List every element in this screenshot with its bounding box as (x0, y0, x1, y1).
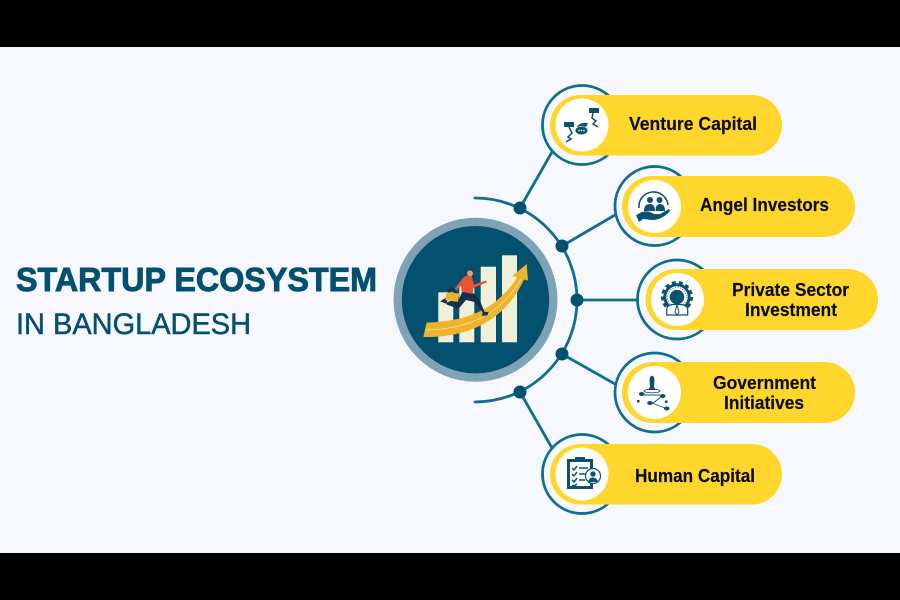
icon: checklist and person (567, 457, 600, 489)
rising arrow (423, 264, 528, 337)
panel: angel investors (615, 166, 855, 246)
icon: gear and businessperson (662, 282, 692, 315)
central growth illustration (394, 218, 558, 382)
label (732, 280, 849, 320)
panel: government initiatives (615, 353, 855, 432)
connector network (475, 152, 637, 448)
label: Angel Investors (700, 195, 829, 215)
panel: human capital (542, 434, 782, 514)
running businessperson (440, 269, 489, 316)
icon: strategy map (637, 376, 670, 410)
label: Initiatives (724, 393, 804, 413)
bar chart (438, 255, 517, 342)
label: Human Capital (635, 466, 755, 486)
title: STARTUP ECOSYSTEM (16, 261, 377, 298)
icon: discussion (564, 108, 599, 142)
panel: venture capital (542, 86, 782, 164)
label: Private Sector (732, 280, 849, 300)
icon: helping hand (636, 192, 670, 222)
title (16, 261, 377, 341)
label: Investment (745, 300, 837, 320)
panel: private sector investment (638, 260, 878, 339)
label: Government (713, 373, 816, 393)
label (713, 373, 816, 413)
title: IN BANGLADESH (16, 308, 251, 341)
label: Venture Capital (629, 114, 757, 134)
